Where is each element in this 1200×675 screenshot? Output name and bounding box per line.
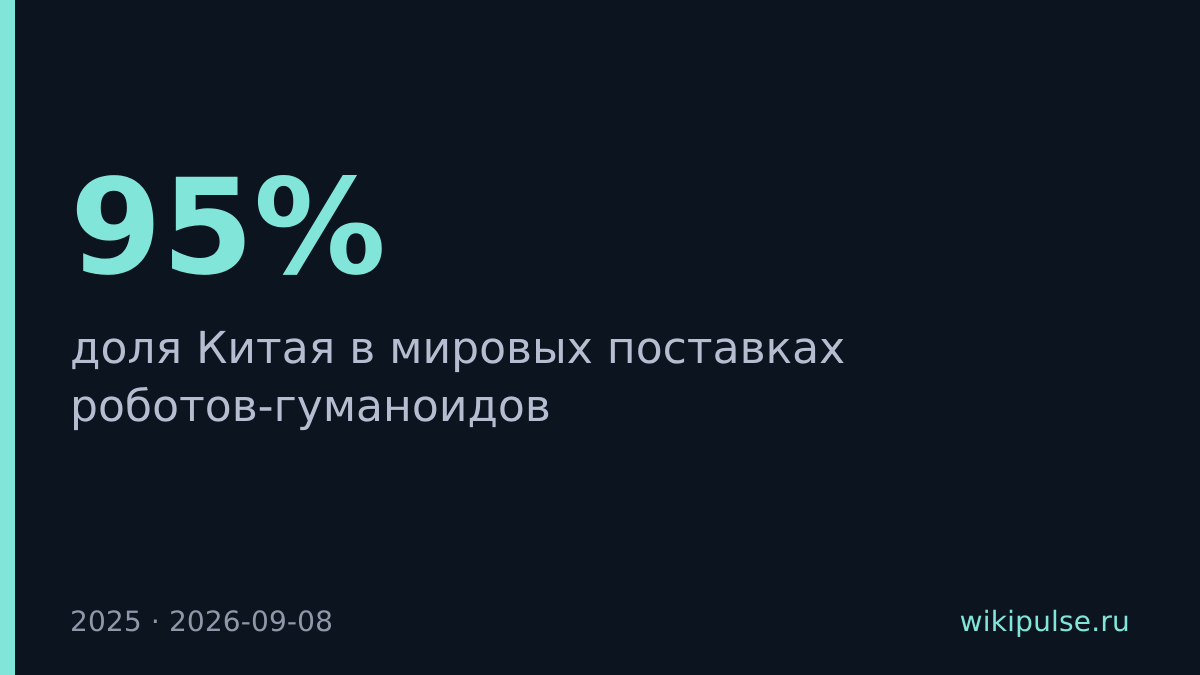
subtitle: доля Китая в мировых поставках (70, 323, 845, 374)
big number: 95% (70, 151, 386, 305)
accent bar (0, 0, 15, 675)
date: 2025 · 2026-09-08 (70, 605, 333, 638)
subtitle: роботов-гуманоидов (70, 381, 551, 432)
source site: wikipulse.ru (960, 605, 1130, 638)
subtitle (70, 323, 845, 432)
